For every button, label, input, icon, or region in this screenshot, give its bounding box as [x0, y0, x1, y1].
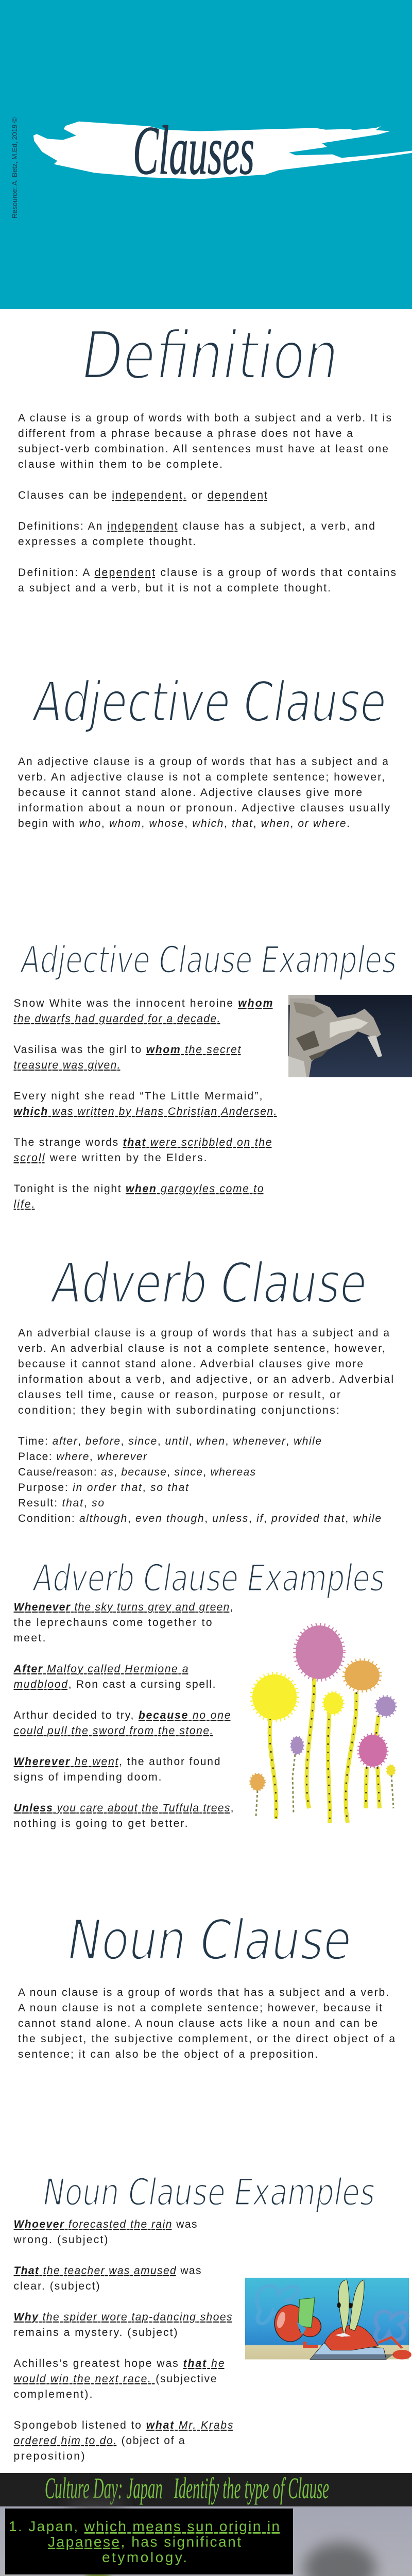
text block: adjective clause: [18, 756, 390, 829]
text block: adverb clause: verb. An adverbial clause is not a complete sentence, however,: [18, 1343, 385, 1354]
text block: adverb clause: Place: where, wherever: [18, 1451, 147, 1463]
text block: definition: a subject and a verb, but it is not a complete thought.: [18, 582, 331, 594]
text block: adjective clause examples: The strange words that were scribbled on the: [13, 1137, 272, 1148]
text block: noun clause examples: Spongebob listened to what Mr. Krabs: [13, 2419, 233, 2431]
text block: adjective clause examples: Tonight is the night when gargoyles come to: [13, 1183, 264, 1195]
question box 1: 1. Japan, which means sun origin in: [9, 2518, 280, 2534]
header banner: [0, 0, 412, 309]
text block: definition: Definition: A dependent clause is a group of words that contains: [18, 567, 396, 579]
title: Clauses: [133, 112, 254, 189]
question box 1: Japanese, has significant: [48, 2534, 241, 2550]
text block: adjective clause examples: scroll were written by the Elders.: [13, 1152, 207, 1164]
text block: adjective clause: because it cannot stand alone. Adjective clauses give more: [18, 787, 362, 799]
text block: adverb clause examples: meet.: [13, 1632, 45, 1644]
text block: noun clause examples: would win the next race. (subjective: [13, 2373, 216, 2385]
text block: adjective clause: An adjective clause is a group of words that has a subject and a: [18, 756, 388, 768]
text block: noun clause examples: remains a mystery. (subject): [13, 2327, 177, 2338]
question box 1: etymology.: [102, 2549, 187, 2565]
text block: noun clause: cannot stand alone. A noun clause acts like a noun and can be: [18, 2018, 377, 2029]
text block: adjective clause: begin with who, whom, whose, which, that, when, or where.: [18, 818, 350, 829]
text block: adverb clause examples: could pull the sword from the stone.: [13, 1725, 213, 1737]
text block: adjective clause examples: treasure was given.: [13, 1059, 121, 1071]
image: gargoyle: [288, 995, 412, 1077]
text block: noun clause examples: complement).: [13, 2388, 93, 2400]
text block: adverb clause: Purpose: in order that, so that: [18, 1482, 189, 1494]
text block: adverb clause examples: Whenever the sky turns grey and green,: [13, 1601, 233, 1613]
text block: adjective clause: verb. An adjective clause is not a complete sentence; however,: [18, 771, 385, 783]
text block: adverb clause: clauses tell time, cause or reason, purpose or result, or: [18, 1389, 340, 1401]
text block: adjective clause examples: which was written by Hans Christian Andersen.: [13, 1106, 277, 1117]
image: truffula trees: [250, 1625, 396, 1823]
text block: noun clause examples: clear. (subject): [13, 2280, 100, 2292]
text block: adjective clause examples: Snow White was the innocent heroine whom: [13, 997, 273, 1009]
text block: adjective clause: information about a noun or pronoun. Adjective clauses usually: [18, 802, 390, 814]
text block: adverb clause: information about a verb, and adjective, or an adverb. Adverbial: [18, 1374, 393, 1385]
text block: noun clause examples: Achilles’s greatest hope was that he: [13, 2358, 225, 2369]
brush stroke behind title: [33, 122, 412, 179]
text block: adverb clause: Condition: although, even though, unless, if, provided that, while: [18, 1513, 381, 1524]
text block: adverb clause: [18, 1327, 393, 1524]
text block: adjective clause examples: Vasilisa was the girl to whom the secret: [13, 1044, 242, 1056]
text block: adverb clause examples: nothing is going to get better.: [13, 1818, 187, 1829]
text block: noun clause: the subject, the subjective complement, or the direct object of a: [18, 2033, 395, 2045]
text block: adjective clause examples: life.: [13, 1198, 35, 1210]
text block: adverb clause examples: signs of impending doom.: [13, 1771, 162, 1783]
text block: noun clause: sentence; it can also be the object of a preposition.: [18, 2048, 318, 2060]
text block: noun clause examples: Whoever forecasted the rain was: [13, 2218, 197, 2230]
text block: adverb clause examples: the leprechauns come together to: [13, 1617, 212, 1629]
text block: definition: A clause is a group of words with both a subject and a verb. It is: [18, 412, 391, 424]
text block: definition: Definitions: An independent clause has a subject, a verb, and: [18, 520, 375, 532]
text block: noun clause examples: ordered him to do. (object of a: [13, 2435, 185, 2447]
text block: adverb clause: Cause/reason: as, because, since, whereas: [18, 1466, 255, 1478]
text block: adverb clause examples: Unless you care about the Tuffula trees,: [13, 1802, 234, 1814]
panel: Japan activity: [0, 2501, 412, 2576]
text block: adverb clause: because it cannot stand alone. Adverbial clauses give more: [18, 1358, 363, 1370]
text block: definition: Clauses can be independent. or dependent: [18, 489, 267, 501]
text block: definition: different from a phrase because a phrase does not have a: [18, 428, 353, 439]
text block: adverb clause: Result: that, so: [18, 1497, 104, 1509]
text block: noun clause: A noun clause is not a complete sentence; however, because it: [18, 2002, 382, 2014]
question box 1: [5, 2509, 293, 2574]
text block: noun clause examples: Why the spider wore tap-dancing shoes: [13, 2311, 232, 2323]
text block: definition: [18, 412, 396, 594]
text block: adjective clause examples: Every night she read “The Little Mermaid”,: [13, 1090, 263, 1102]
text block: definition: clause within them to be complete.: [18, 459, 222, 470]
text block: adverb clause examples: After Malfoy called Hermione a: [13, 1663, 188, 1675]
text block: adverb clause examples: Arthur decided to try, because no one: [13, 1709, 231, 1721]
text block: noun clause examples: That the teacher was amused was: [13, 2265, 201, 2277]
text block: adverb clause: An adverbial clause is a group of words that has a subject and a: [18, 1327, 389, 1339]
text block: noun clause examples: wrong. (subject): [13, 2234, 108, 2246]
image: Mr. Krabs: [245, 2278, 411, 2360]
image: Japanese temple scene: [0, 2501, 412, 2576]
text block: adverb clause examples: mudblood, Ron cast a cursing spell.: [13, 1679, 215, 1690]
text block: adverb clause: condition; they begin with subordinating conjunctions:: [18, 1404, 339, 1416]
text block: definition: expresses a complete thought.: [18, 536, 196, 548]
text block: adverb clause: Time: after, before, since, until, when, whenever, while: [18, 1435, 321, 1447]
text block: noun clause: A noun clause is a group of words that has a subject and a verb.: [18, 1987, 389, 1998]
panel: culture day banner: [0, 2471, 412, 2506]
heading: Noun Clause: Noun Clause: [68, 1908, 351, 1973]
text block: noun clause: [18, 1987, 395, 2060]
text block: adjective clause examples: [13, 997, 277, 1210]
text block: adverb clause examples: [13, 1601, 234, 1829]
text block: definition: subject-verb combination. All sentences must have at least one: [18, 443, 388, 455]
text block: adverb clause examples: Wherever he went, the author found: [13, 1756, 220, 1768]
text block: adjective clause examples: the dwarfs had guarded for a decade.: [13, 1013, 220, 1025]
resource credit: Resource: A. Betz, M.Ed, 2019 ©: [11, 117, 19, 218]
heading: Definition: Definition: [82, 316, 338, 395]
text block: noun clause examples: [13, 2218, 233, 2462]
text block: noun clause examples: preposition): [13, 2450, 84, 2462]
